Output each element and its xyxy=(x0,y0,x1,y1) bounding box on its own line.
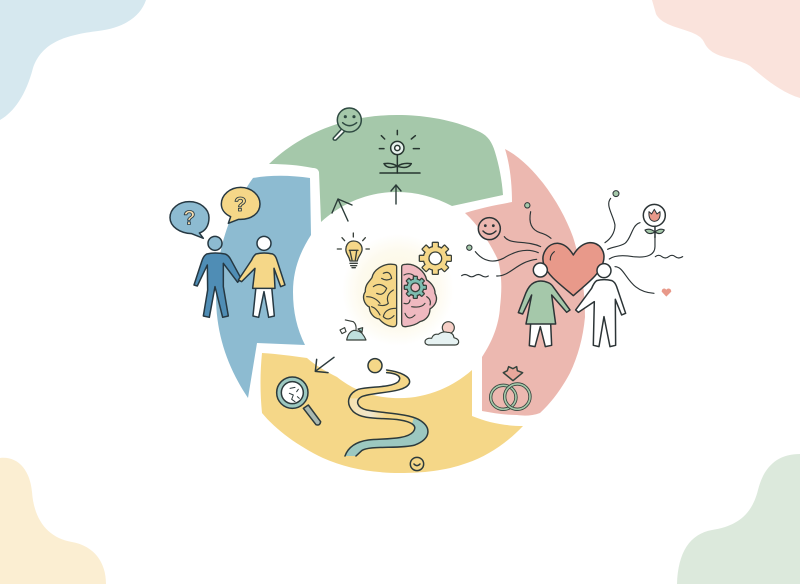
corner blob: bottom right green xyxy=(677,454,800,584)
figure: yellow person xyxy=(238,236,285,317)
corner blob: top left blue xyxy=(0,0,146,120)
squiggles and connectors xyxy=(462,198,683,293)
panel: green segment xyxy=(269,115,503,222)
corner blob: bottom left cream xyxy=(0,458,106,584)
icon: yellow gear xyxy=(419,242,451,274)
group: couple with heart xyxy=(462,191,683,409)
brain: teal gear xyxy=(404,276,426,298)
icon: small check circle xyxy=(410,457,424,471)
group: central brain illustration xyxy=(337,233,459,345)
icon: small heart xyxy=(662,289,671,297)
arrow: down-left xyxy=(315,357,334,373)
icon: wedding rings xyxy=(491,367,530,409)
figure: woman xyxy=(518,263,570,347)
brain: right hemisphere xyxy=(402,264,437,327)
group: yellow segment icons xyxy=(277,357,440,471)
panel: blue segment xyxy=(216,176,311,398)
icon: magnifier xyxy=(277,377,321,425)
center glow xyxy=(342,234,454,346)
figure: blue person xyxy=(194,236,241,317)
panel: yellow segment xyxy=(260,353,523,473)
corner blob: top right pink xyxy=(652,0,800,98)
icon: rose xyxy=(643,204,665,237)
speech bubble: blue question: ? xyxy=(183,207,195,229)
speech bubble: yellow question: ? xyxy=(234,193,247,216)
icon: smiley xyxy=(478,218,500,240)
icon: cloud with pink sun xyxy=(425,322,459,345)
heart xyxy=(543,243,604,296)
icon: teal mound with leaves xyxy=(340,320,366,340)
icon: idea flower sprout xyxy=(379,130,420,173)
winding road xyxy=(344,369,429,457)
small dots xyxy=(467,191,619,250)
group: questioning couple xyxy=(170,187,285,317)
icon: sun dot xyxy=(368,359,382,373)
arrow: up to sprout xyxy=(391,185,401,204)
figure: man xyxy=(576,264,626,347)
brain: left hemisphere xyxy=(364,264,397,327)
icon: light bulb xyxy=(337,233,369,268)
panel: pink segment xyxy=(465,149,585,416)
icon: magnifier with smile xyxy=(333,108,361,140)
arrow: up-left on green xyxy=(332,199,352,221)
